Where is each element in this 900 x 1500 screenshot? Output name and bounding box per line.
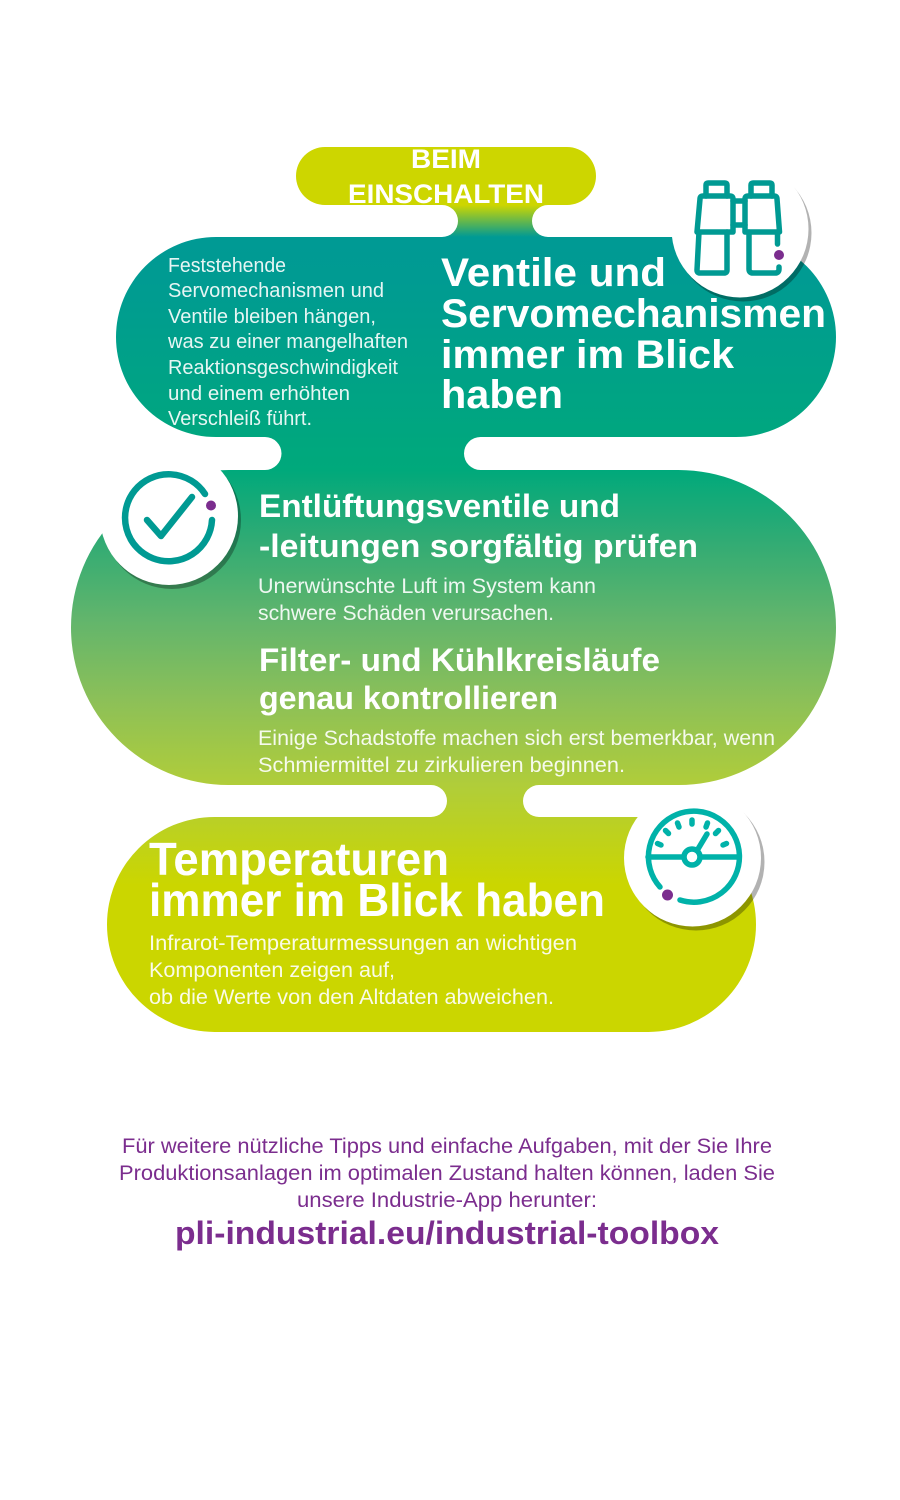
text block: footer note: Für weitere nützliche Tipps und einfache Aufgaben, mit der Sie Ihre	[122, 1135, 772, 1158]
heading: temperatures: Temperaturen	[149, 833, 449, 885]
text block: footer note: Produktionsanlagen im optimalen Zustand halten können, laden Sie	[119, 1162, 775, 1185]
heading: temperatures	[149, 833, 605, 926]
heading: filter circuits	[259, 642, 660, 716]
heading: vent lines	[259, 488, 698, 564]
text block: temperature description: ob die Werte von den Altdaten abweichen.	[149, 986, 554, 1009]
heading: valves: haben	[441, 373, 563, 417]
link text: pli-industrial.eu/industrial-toolbox	[175, 1215, 719, 1251]
panel: valves and servomechanisms	[167, 160, 826, 430]
icon: gauge	[624, 790, 764, 930]
text block: valves description: Ventile bleiben hängen,	[168, 306, 376, 328]
text block: footer note	[119, 1135, 775, 1212]
panel: temperatures	[149, 790, 764, 1009]
panel: vents and filters	[100, 447, 775, 777]
icon: binoculars	[672, 160, 812, 302]
heading: valves: Ventile und	[441, 251, 666, 295]
text block: valves description: was zu einer mangelhaften	[167, 331, 408, 353]
title pill text	[348, 144, 544, 209]
text block: valves description	[167, 255, 408, 430]
text block: temperature description: Infrarot-Temperaturmessungen an wichtigen	[149, 932, 577, 955]
text block: filter description: Einige Schadstoffe machen sich erst bemerkbar, wenn	[258, 727, 775, 750]
footer call to action	[119, 1135, 775, 1251]
text block: temperature description: Komponenten zeigen auf,	[149, 959, 395, 982]
icon: check mark	[100, 447, 241, 589]
text block: valves description: Reaktionsgeschwindigkeit	[168, 357, 398, 379]
heading: valves: Servomechanismen	[441, 292, 826, 336]
text block: valves description: Verschleiß führt.	[168, 408, 312, 430]
text block: temperature description	[149, 932, 577, 1009]
text block: filter description: Schmiermittel zu zirkulieren beginnen.	[258, 754, 625, 777]
heading: filter circuits: Filter- und Kühlkreisläufe	[259, 642, 660, 678]
text block: footer note: unsere Industrie-App herunter:	[297, 1189, 597, 1212]
text block: vent description: schwere Schäden verursachen.	[258, 602, 554, 625]
text block: valves description: Servomechanismen und	[168, 280, 384, 302]
heading: filter circuits: genau kontrollieren	[259, 680, 558, 716]
text block: filter description	[258, 727, 775, 777]
heading: vent lines: Entlüftungsventile und	[259, 488, 620, 524]
flowing background shape with three panels	[71, 147, 836, 1032]
text block: valves description: Feststehende	[168, 255, 286, 277]
title pill text: EINSCHALTEN	[348, 179, 544, 209]
heading: valves	[441, 251, 826, 417]
heading: vent lines: -leitungen sorgfältig prüfen	[259, 528, 698, 564]
heading: valves: immer im Blick	[441, 333, 735, 377]
title pill text: BEIM	[411, 144, 481, 174]
text block: vent description: Unerwünschte Luft im System kann	[258, 575, 596, 598]
text block: valves description: und einem erhöhten	[168, 383, 350, 405]
heading: temperatures: immer im Blick haben	[149, 874, 605, 926]
text block: vent description	[258, 575, 596, 625]
